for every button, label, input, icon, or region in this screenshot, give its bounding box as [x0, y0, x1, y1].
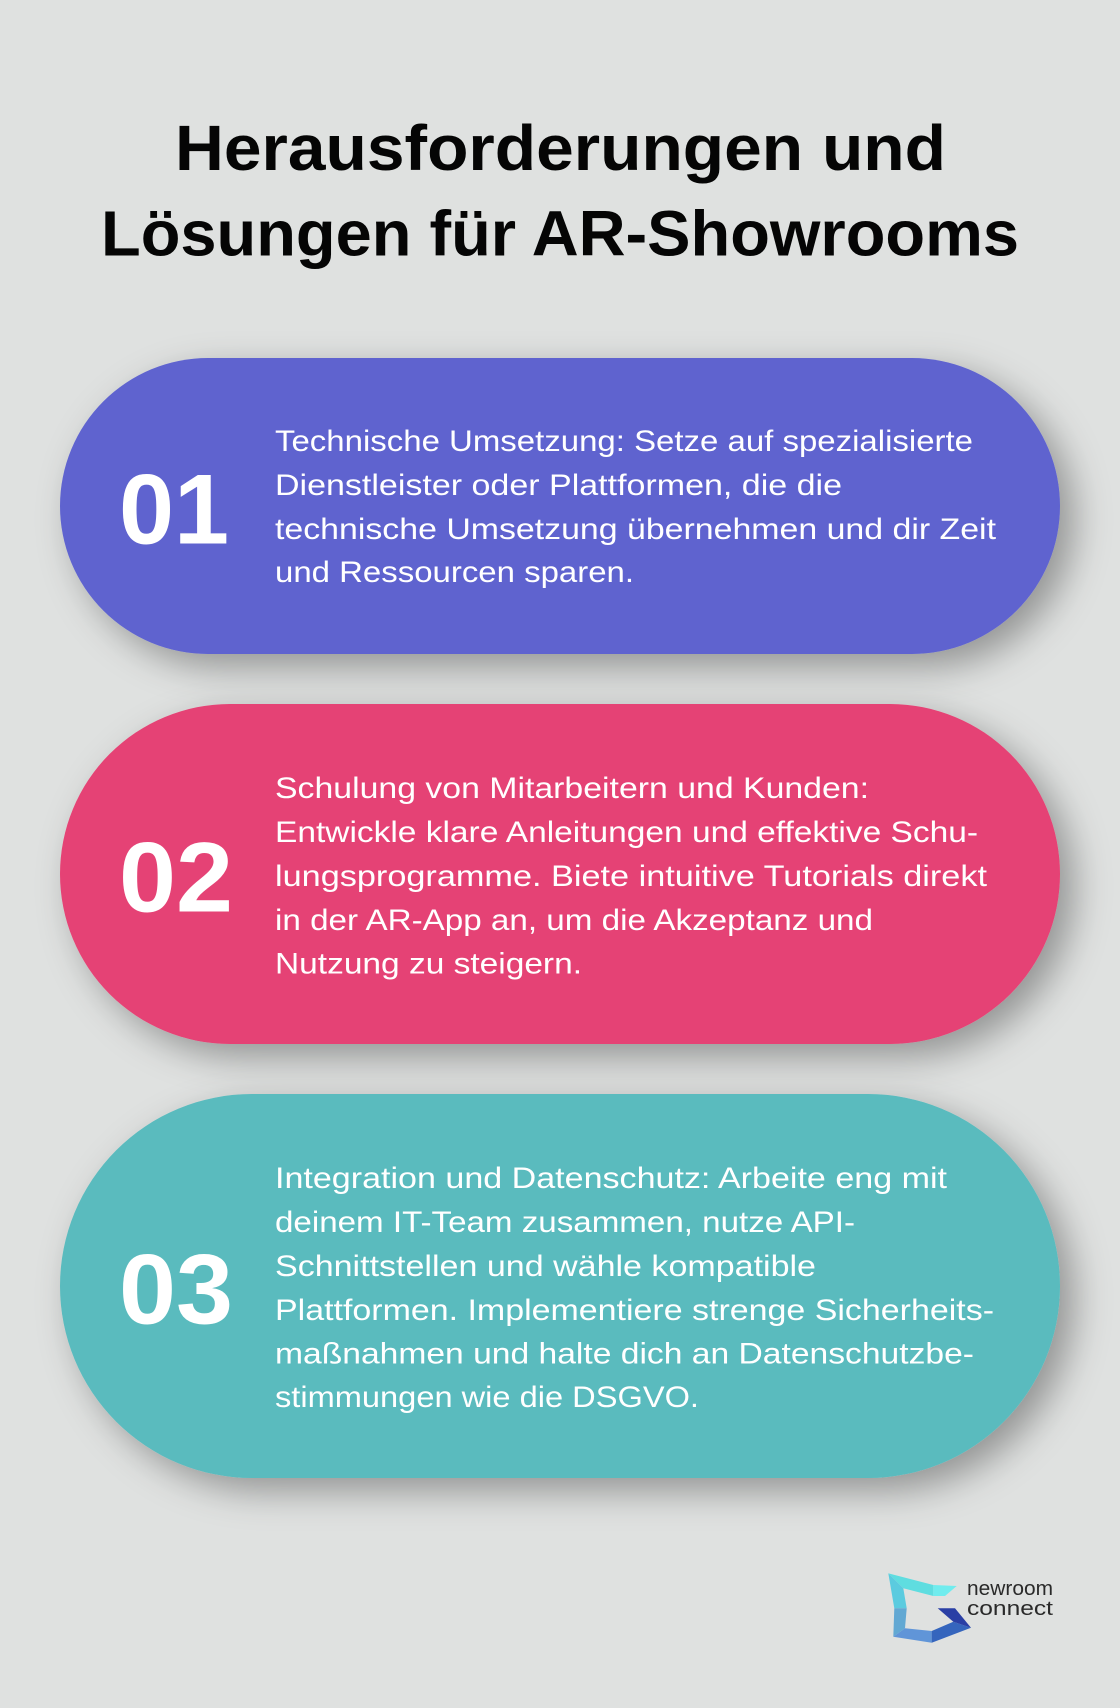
text block 02: Nutzung zu steigern. — [275, 948, 582, 980]
number 03: 03 — [119, 1234, 233, 1344]
logo wordmark: newroom — [967, 1578, 1053, 1600]
number 01: 01 — [119, 454, 229, 564]
text block 02: Entwickle klare Anleitungen und effektive Schu- — [275, 816, 978, 849]
text block 02 — [275, 772, 987, 980]
text block 01: Dienstleister oder Plattformen, die die — [275, 469, 842, 502]
text block 03 — [275, 1162, 994, 1414]
logo: newroom connect — [888, 1573, 1054, 1643]
panel: 01 technische Umsetzung — [60, 358, 1060, 654]
number 02: 02 — [119, 822, 233, 932]
text block 01: und Ressourcen sparen. — [275, 556, 634, 589]
text block 02: lungsprogramme. Biete intuitive Tutorials direkt — [275, 860, 987, 893]
icon: logo mark — [888, 1573, 971, 1643]
text block 01: technische Umsetzung übernehmen und dir Zeit — [275, 513, 996, 546]
logo wordmark — [967, 1578, 1054, 1620]
text block 02: in der AR-App an, um die Akzeptanz und — [275, 904, 873, 937]
text block 03: stimmungen wie die DSGVO. — [275, 1381, 699, 1414]
panel: 02 Schulung — [60, 704, 1060, 1044]
text block 01: Technische Umsetzung: Setze auf spezialisierte — [275, 425, 973, 458]
title: Lösungen für AR-Showrooms — [101, 198, 1019, 270]
text block 03: Schnittstellen und wähle kompatible — [275, 1250, 816, 1283]
text block 03: maßnahmen und halte dich an Datenschutzbe- — [275, 1338, 974, 1370]
title: Herausforderungen und — [175, 112, 946, 184]
text block 02: Schulung von Mitarbeitern und Kunden: — [275, 772, 869, 805]
logo wordmark: connect — [967, 1598, 1054, 1620]
text block 03: deinem IT-Team zusammen, nutze API- — [275, 1206, 855, 1239]
text block 03: Integration und Datenschutz: Arbeite eng mit — [275, 1162, 947, 1195]
text block 01 — [275, 425, 996, 589]
title — [101, 112, 1019, 270]
panel: 03 Integration und Datenschutz — [60, 1094, 1060, 1478]
text block 03: Plattformen. Implementiere strenge Sicherheits- — [275, 1294, 994, 1327]
